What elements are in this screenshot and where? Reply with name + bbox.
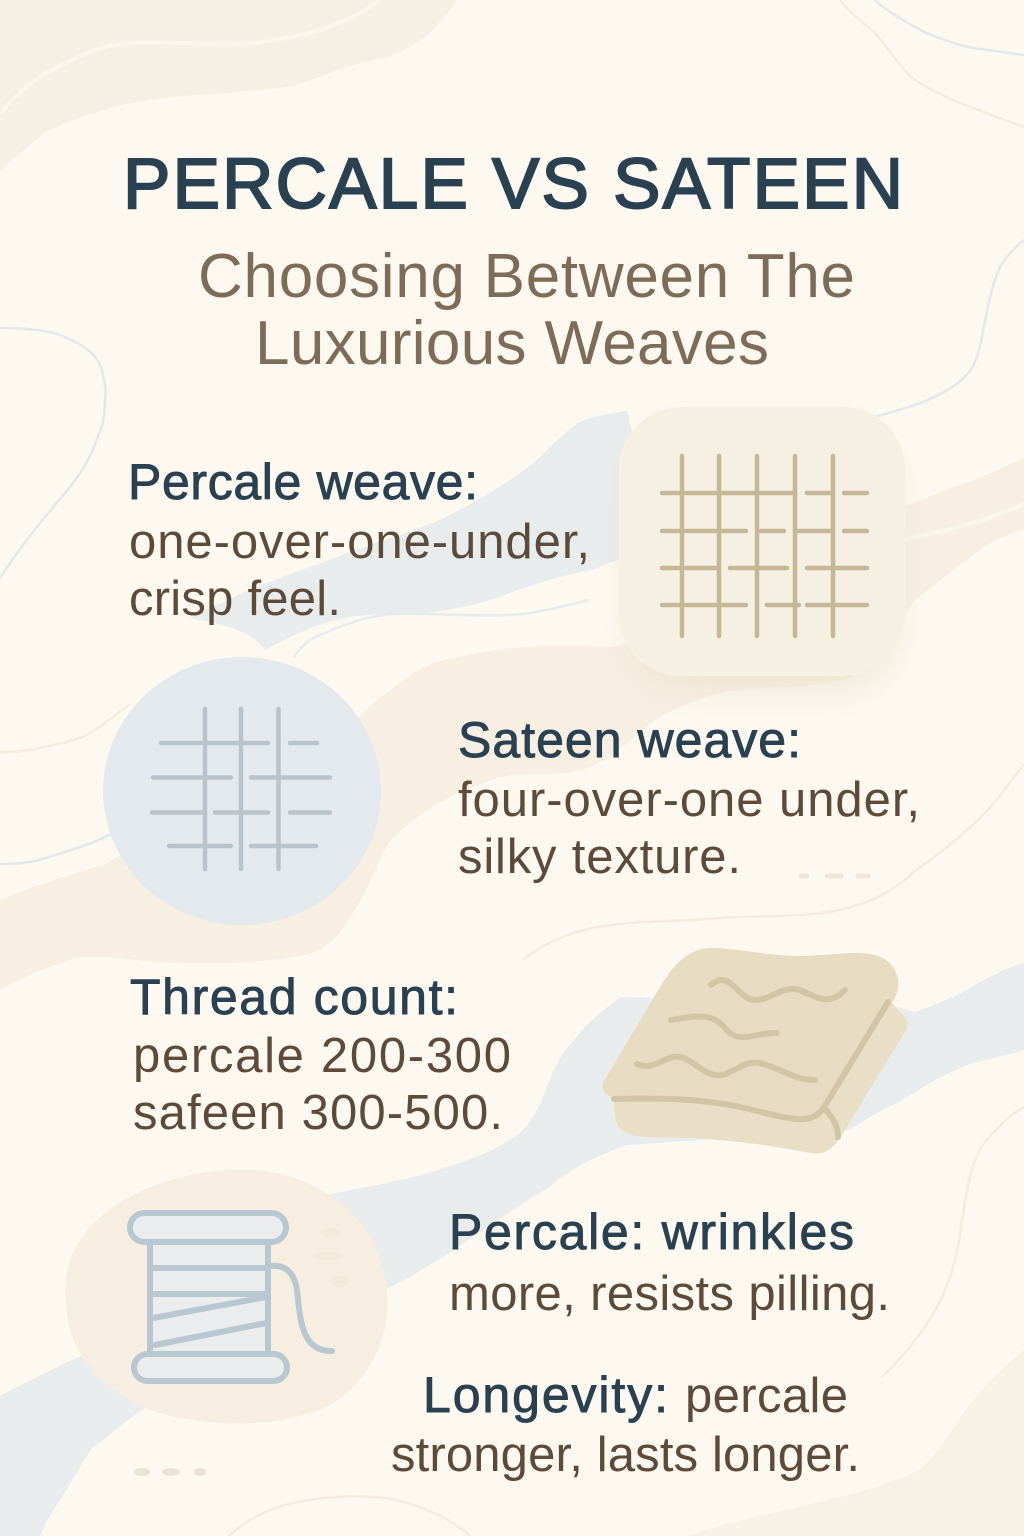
- text: thread count: percale 200-300: [133, 1029, 511, 1083]
- title: PERCALE VS SATEEN: [123, 145, 903, 224]
- text: sateen weave: [458, 712, 920, 884]
- faint dots: [134, 1468, 206, 1476]
- icon: thread spool: [65, 1169, 387, 1424]
- text: percale wrinkles: Percale: wrinkles: [449, 1204, 854, 1260]
- card: percale weave icon: [619, 407, 905, 693]
- text: percale wrinkles: [449, 1204, 890, 1321]
- icon: sateen weave circle: [103, 657, 381, 925]
- text: sateen weave: Sateen weave:: [458, 712, 801, 768]
- subtitle: Luxurious Weaves: [255, 309, 769, 378]
- text: longevity: percale: [685, 1369, 848, 1423]
- icon: folded fabric: [603, 948, 908, 1154]
- text: sateen weave: silky texture.: [458, 830, 741, 884]
- text: thread count: Thread count:: [130, 969, 458, 1025]
- text: longevity: stronger, lasts longer.: [391, 1428, 860, 1482]
- text: sateen weave: four-over-one under,: [458, 773, 920, 827]
- text: thread count: safeen 300-500.: [133, 1086, 503, 1140]
- text: percale weave: Percale weave:: [128, 454, 478, 510]
- text: percale weave: [128, 454, 590, 626]
- subtitle: Choosing Between The: [198, 242, 855, 311]
- text: percale wrinkles: more, resists pilling.: [449, 1267, 890, 1321]
- text: percale weave: crisp feel.: [129, 572, 341, 626]
- faint dashes: [801, 874, 868, 878]
- text: thread count: [130, 969, 511, 1140]
- text: percale weave: one-over-one-under,: [129, 515, 590, 569]
- text: longevity: Longevity:: [423, 1367, 668, 1423]
- text: longevity: [391, 1367, 860, 1482]
- subtitle: [198, 242, 855, 378]
